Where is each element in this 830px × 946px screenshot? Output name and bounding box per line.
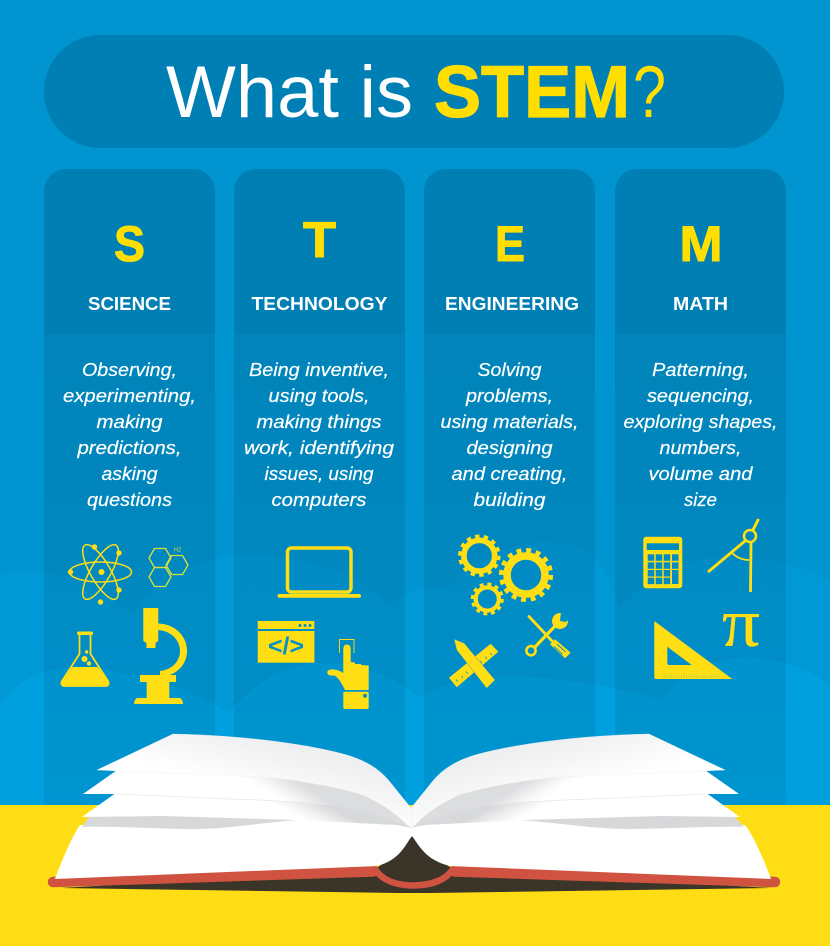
label: technology: TECHNOLOGY: [252, 293, 388, 314]
title: ?: [633, 52, 666, 133]
label: math: MATH: [673, 293, 728, 314]
icon: atom: [68, 540, 132, 605]
description: technology: Being inventive,: [249, 360, 389, 380]
title: [166, 52, 666, 133]
right page block: [412, 816, 771, 879]
icon: calculator: [643, 537, 682, 588]
background clouds: [0, 542, 830, 810]
description: math: size: [684, 490, 717, 510]
icon: wrench and screwdriver: [526, 612, 571, 658]
icon: set square: [654, 621, 732, 679]
description: technology: issues, using: [264, 464, 374, 484]
panel: technology: [234, 169, 405, 806]
icon: compass: [708, 519, 758, 592]
label: science: SCIENCE: [88, 293, 171, 314]
description: engineering: building: [474, 490, 546, 510]
description: science: [63, 360, 196, 510]
icon: gears: [460, 536, 551, 614]
description: engineering: designing: [466, 438, 552, 458]
title banner: [44, 35, 784, 148]
left gray page edge: [82, 815, 300, 829]
icon: code window: [258, 621, 314, 663]
letter T: T: [303, 212, 336, 268]
icon: pencil and ruler: [449, 639, 498, 688]
description: technology: computers: [272, 490, 366, 510]
description: science: Observing,: [82, 360, 177, 380]
description: technology: making things: [256, 412, 382, 432]
description: math: numbers,: [660, 438, 742, 458]
panel: engineering: [424, 169, 595, 806]
description: engineering: [440, 360, 578, 510]
red cover: [53, 869, 775, 886]
description: science: questions: [87, 490, 172, 510]
left top page: [97, 734, 412, 828]
letter M: M: [680, 216, 722, 272]
description: math: sequencing,: [647, 386, 754, 406]
left page block: [55, 816, 412, 879]
right lower pages: [410, 768, 740, 828]
description: science: predictions,: [76, 438, 182, 458]
right top page: [411, 734, 725, 828]
description: technology: using tools,: [268, 386, 370, 406]
description: engineering: problems,: [465, 386, 553, 406]
label: engineering: ENGINEERING: [445, 293, 579, 314]
title: What is: [166, 52, 413, 133]
description: science: experimenting,: [63, 386, 196, 406]
description: technology: [244, 360, 394, 510]
description: science: asking: [102, 464, 158, 484]
description: math: [624, 360, 778, 510]
icon: hexagon molecule: [149, 548, 188, 586]
panel: math: [615, 169, 786, 806]
floor: [0, 805, 830, 946]
description: technology: work, identifying: [244, 438, 394, 458]
icon: pointing hand: [327, 640, 369, 709]
description: math: Patterning,: [652, 360, 749, 380]
right gray page edge: [517, 815, 744, 829]
description: engineering: Solving: [478, 360, 542, 380]
icon: microscope: [134, 608, 187, 704]
icon: pi symbol: π: [722, 585, 760, 661]
letter E: E: [495, 216, 525, 272]
description: engineering: using materials,: [440, 412, 578, 432]
panel: science: [44, 169, 215, 806]
description: science: making: [96, 412, 162, 432]
left lower pages: [82, 768, 412, 828]
book shadow and spine: [60, 836, 772, 893]
icon: flask: [61, 632, 109, 686]
title: STEM: [434, 52, 630, 133]
icon: hexagon molecule: H2: [174, 548, 182, 554]
description: engineering: and creating,: [452, 464, 568, 484]
open book: [53, 734, 775, 893]
letter S: S: [114, 216, 145, 272]
icon: code window: </>: [268, 633, 304, 660]
description: math: exploring shapes,: [624, 412, 778, 432]
description: math: volume and: [648, 464, 754, 484]
icon: laptop: [278, 548, 361, 598]
